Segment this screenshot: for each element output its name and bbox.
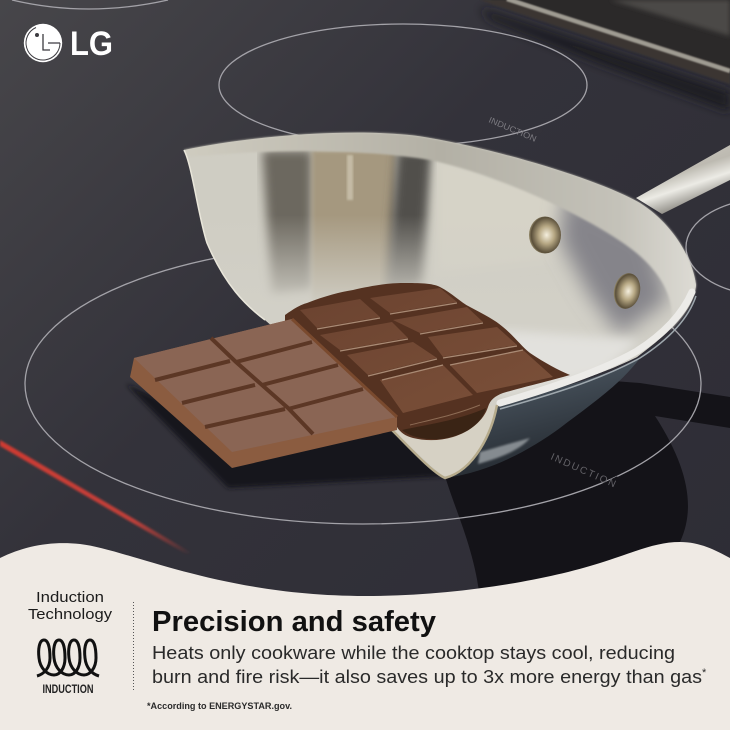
melted chocolate (285, 283, 570, 440)
pan handle (636, 145, 730, 214)
pan interior (180, 125, 700, 485)
rivets (529, 216, 643, 311)
body text (152, 642, 707, 687)
pan back rim (184, 133, 696, 330)
footnote: *According to ENERGYSTAR.gov. (147, 701, 292, 712)
induction technology label: Induction (36, 589, 104, 606)
induction icon caption: INDUCTION (42, 682, 94, 696)
solid chocolate bar (130, 319, 397, 468)
induction technology label (28, 589, 113, 623)
pan left cut edge (184, 150, 265, 320)
red laser line (0, 440, 192, 554)
ring label gaps (528, 130, 618, 486)
rail at top right (480, 0, 730, 112)
body text: * (702, 667, 707, 679)
induction technology label: Technology (28, 606, 113, 623)
banner (0, 542, 730, 730)
body text: Heats only cookware while the cooktop stays cool, reducing (152, 642, 675, 663)
pan front rim highlight (392, 292, 696, 478)
icon: induction coil (37, 640, 99, 676)
dotted divider (132, 602, 134, 692)
pan shadow (126, 380, 730, 600)
induction ring labels: INDUCTION (549, 452, 617, 490)
induction ring labels (487, 115, 617, 490)
body text: burn and fire risk—it also saves up to 3x more energy than gas (152, 666, 702, 687)
LG logo (24, 24, 113, 63)
LG logo: LG (70, 25, 113, 63)
heading: Precision and safety (152, 606, 436, 638)
cooktop burner rings (12, 0, 730, 524)
induction ring labels: INDUCTION (487, 115, 538, 144)
pan outer wall (445, 358, 640, 478)
